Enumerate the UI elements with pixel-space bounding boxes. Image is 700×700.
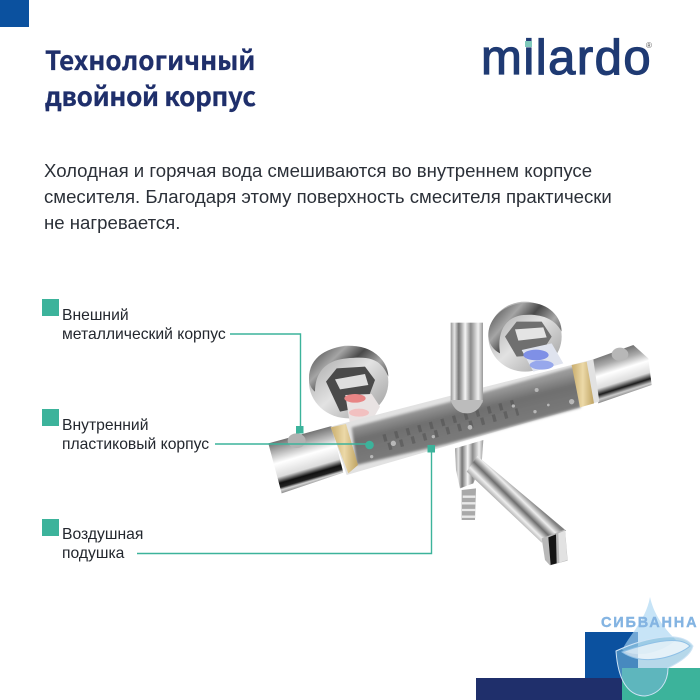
watermark tub <box>616 637 693 696</box>
vertical pipe <box>451 323 483 413</box>
title <box>45 41 256 114</box>
label: inner plastic body <box>62 417 209 452</box>
description text: смесителя. Благодаря этому поверхность смесителя практически <box>44 186 612 207</box>
watermark tub inner <box>622 640 690 660</box>
watermark text: СИБВАННА <box>601 615 698 631</box>
label: outer metal body <box>62 307 226 342</box>
body: transparent inner section <box>331 359 599 475</box>
body: outer metal ends <box>268 345 652 493</box>
label: air cushion <box>62 526 143 562</box>
legend marker 2 <box>42 409 58 426</box>
corner square <box>0 0 29 27</box>
left wall flange <box>309 346 388 424</box>
corner block: blue <box>585 632 638 688</box>
description text: Холодная и горячая вода смешиваются во внутреннем корпусе <box>44 160 592 181</box>
label: air cushion: Воздушная <box>62 526 143 543</box>
corner block: navy <box>476 678 622 700</box>
title: Технологичный <box>45 41 255 78</box>
label: inner plastic body: Внутренний <box>62 417 148 434</box>
callout lines <box>137 334 432 554</box>
description text: не нагревается. <box>44 212 180 233</box>
label: air cushion: подушка <box>62 544 124 562</box>
label: outer metal body: металлический корпус <box>62 326 226 342</box>
watermark: Сибванна <box>601 598 698 696</box>
label: outer metal body: Внешний <box>62 307 129 324</box>
logo: milardo: ® <box>646 41 652 50</box>
legend marker 3 <box>42 519 58 536</box>
faucet spout and hose <box>455 440 568 565</box>
callout markers <box>296 426 435 452</box>
logo: milardo: milardo <box>481 31 652 85</box>
title: двойной корпус <box>45 77 256 114</box>
right wall flange <box>488 302 563 372</box>
description text <box>44 160 612 233</box>
watermark drop <box>622 597 676 654</box>
corner block: teal <box>622 668 700 700</box>
label: inner plastic body: пластиковый корпус <box>62 436 209 452</box>
legend marker 1 <box>42 299 58 316</box>
